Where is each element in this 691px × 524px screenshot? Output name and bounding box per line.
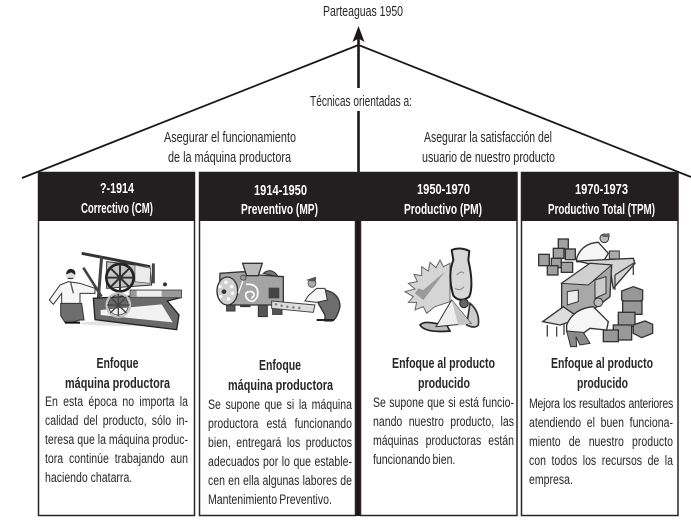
text block: Enfoque al producto producido: Enfoque al producto xyxy=(551,356,653,372)
text block: Productivo Total description: Mejora los resultados anteriores xyxy=(529,396,673,410)
text block: Enfoque al producto producido: producido xyxy=(577,376,628,392)
header band: Preventivo xyxy=(199,172,357,221)
header band: Correctivo: Correctivo (CM) xyxy=(81,201,153,217)
roof: house roof lines xyxy=(22,45,691,178)
text block: Enfoque al producto producido: producido xyxy=(418,376,470,392)
text block: Enfoque al producto producido xyxy=(392,356,495,392)
text block: right roof label xyxy=(422,130,555,166)
text block: Productivo description: Se supone que si está funcio- xyxy=(373,394,514,410)
text block: Enfoque máquina productora: Enfoque xyxy=(96,356,138,372)
text block: left roof label xyxy=(164,130,296,166)
icon: man operating printing press xyxy=(49,253,182,330)
text block: Productivo description: funcionando bien. xyxy=(373,452,455,467)
text block: Preventivo description xyxy=(208,394,408,514)
text block: Preventivo description: productora está funcionando xyxy=(208,416,352,431)
header band: Productivo Total xyxy=(521,172,678,221)
panel: Preventivo (MP) xyxy=(199,172,408,516)
text block: Enfoque al producto producido xyxy=(551,356,653,392)
header band: Productivo Total: 1970-1973 xyxy=(575,182,628,198)
text block: Enfoque máquina productora xyxy=(228,358,334,394)
text block: Productivo description xyxy=(373,392,573,482)
header band: Productivo: Productivo (PM) xyxy=(404,202,482,218)
panel: Correctivo (CM) xyxy=(38,172,245,516)
text block: Preventivo description: Mantenimiento Preventivo. xyxy=(208,492,332,507)
header band: Preventivo: Preventivo (MP) xyxy=(241,202,318,218)
panel: Productivo Total (TPM) xyxy=(521,172,691,516)
text block: Preventivo description: Se supone que si la máquina xyxy=(208,396,352,412)
heading: Parteaguas 1950: Parteaguas 1950 xyxy=(323,4,403,20)
icon: worker at processing machine xyxy=(217,263,340,321)
text block: Productivo Total description: miento de nuestro producto xyxy=(529,434,673,449)
panel: Productivo (PM) xyxy=(357,172,573,516)
header band: Productivo xyxy=(357,172,518,221)
text block: Enfoque máquina productora: máquina productora xyxy=(228,378,334,394)
text block: Correctivo description: haciendo chatarra. xyxy=(45,470,132,485)
text block: Productivo description: máquinas productoras están xyxy=(373,433,514,448)
text block: Preventivo description: bien, entregará los productos xyxy=(208,435,352,450)
text block: left roof label: de la máquina productora xyxy=(168,150,292,166)
text block: Productivo Total description: atendiendo el buen funciona- xyxy=(529,415,673,430)
icon: workers packing boxes on a production line xyxy=(539,233,653,347)
text block: Correctivo description xyxy=(45,392,245,502)
central divider xyxy=(356,172,360,516)
header band: Correctivo xyxy=(38,172,195,221)
text block: Preventivo description: cen en ella algunas labores de xyxy=(208,473,352,488)
text block: Enfoque al producto producido: Enfoque al producto xyxy=(392,356,495,372)
text block: Preventivo description: adecuados por lo que estable- xyxy=(208,454,352,469)
text block: Correctivo description: teresa que la máquina produc- xyxy=(45,432,188,447)
label: Técnicas orientadas a: Técnicas orientadas a: xyxy=(310,94,412,110)
text block: left roof label: Asegurar el funcionamiento xyxy=(164,130,296,146)
header band: Correctivo: ?-1914 xyxy=(100,181,134,197)
text block: Correctivo description: tora continúe trabajando aun xyxy=(45,451,188,466)
arrow: central axis with arrowhead xyxy=(352,26,364,172)
text block: right roof label: usuario de nuestro producto xyxy=(422,150,555,166)
icon: product figure with star, check mark and pyramid xyxy=(405,249,479,331)
header band: Preventivo: 1914-1950 xyxy=(254,183,307,199)
text block: Productivo Total description: empresa. xyxy=(529,472,573,487)
header band: Productivo: 1950-1970 xyxy=(417,182,470,198)
text block: Enfoque máquina productora: máquina productora xyxy=(65,376,171,392)
text block: Productivo Total description: con todos los recursos de la xyxy=(529,453,673,468)
text block: Correctivo description: calidad del producto, sólo in- xyxy=(45,413,188,428)
text block: Productivo description: nando nuestro producto, las xyxy=(373,414,514,429)
text block: Productivo Total description xyxy=(529,394,691,504)
text block: Enfoque máquina productora: Enfoque xyxy=(259,358,301,374)
text block: Enfoque máquina productora xyxy=(65,356,171,392)
text block: Correctivo description: En esta época no importa la xyxy=(45,394,188,408)
text block: right roof label: Asegurar la satisfacción del xyxy=(424,130,552,146)
